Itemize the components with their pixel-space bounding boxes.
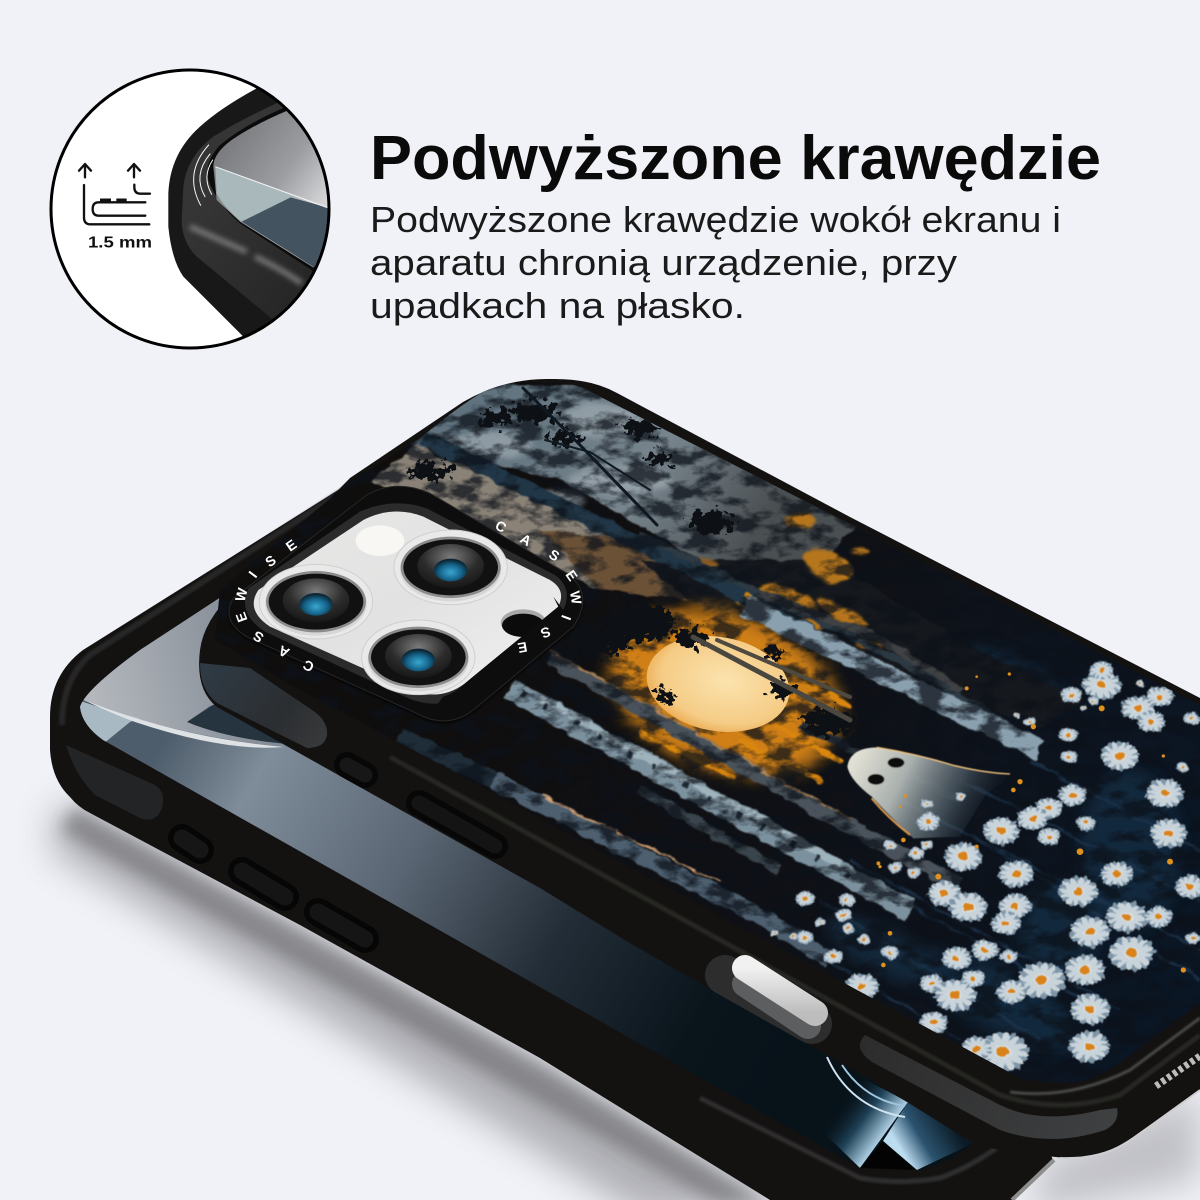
foliage silhouettes [408, 401, 854, 736]
brand lettering: C [300, 657, 317, 676]
corner gloss [1010, 1018, 1200, 1094]
drop shadow under phones [50, 800, 1200, 1200]
flash [356, 525, 404, 556]
orange specks [876, 666, 1186, 973]
brand lettering: S [250, 628, 266, 646]
ring band overlap [437, 597, 563, 705]
artwork base [200, 370, 1200, 1100]
trunk: second dark under moon [550, 657, 960, 885]
side band highlight [390, 757, 1200, 1105]
brand lettering: E [232, 610, 250, 624]
camera glass opening [254, 512, 561, 695]
beige band [370, 444, 608, 590]
arrow left [79, 164, 91, 177]
night streaks [820, 760, 1200, 1040]
white reflection line [215, 167, 328, 208]
black triangle [860, 1141, 916, 1170]
blue light beams [828, 1081, 908, 1168]
brand lettering: I [558, 613, 575, 622]
title: Podwyższone krawędzie [370, 124, 1101, 193]
brand lettering: S [546, 546, 563, 564]
trunk: dark blue top [418, 432, 824, 632]
translucent patch right [860, 1035, 1118, 1139]
translucent corner patch [66, 745, 163, 820]
bumper highlight [62, 480, 360, 725]
body text: upadkach na płasko. [370, 285, 745, 326]
dim trunk [800, 725, 960, 800]
raised lip [134, 185, 150, 194]
moon [646, 636, 790, 732]
trunk: gray upper [760, 593, 960, 690]
body text: aparatu chronią urządzenie, przy [370, 242, 957, 283]
icon: raised edge diagram [79, 164, 150, 224]
painted forest layer [370, 385, 1200, 1040]
dark wedge [187, 704, 282, 744]
body text: Podwyższone krawędzie wokół ekranu i [370, 199, 1061, 240]
port recess [745, 984, 808, 1026]
birch trunks [400, 438, 1040, 960]
lens: left [259, 564, 373, 639]
phone buttons [100, 195, 127, 206]
arrow right [128, 164, 140, 177]
brand lettering [232, 517, 585, 676]
trunk: thin dark upper [638, 532, 1010, 723]
screen dark lower [242, 197, 333, 267]
brand lettering: I [245, 568, 260, 581]
outer case [168, 88, 340, 337]
speaker holes [1156, 1056, 1200, 1086]
circle outline [51, 70, 329, 348]
inner bevel [245, 503, 567, 704]
screen of lower phone [80, 598, 973, 1170]
translucent patch left [200, 663, 327, 748]
silver right edge [1012, 1160, 1054, 1200]
moon glow [596, 596, 854, 788]
pressure arcs [194, 145, 213, 205]
orange patches upper right [682, 513, 884, 648]
raised edge detail circle [51, 70, 340, 348]
screen light wedge [215, 167, 327, 222]
small speaker pill [347, 765, 365, 775]
glow streaks [638, 684, 852, 786]
phone corner close-up [168, 88, 340, 337]
rim light [1060, 1090, 1200, 1158]
circle fill [51, 70, 329, 348]
branches and thin trunks over moon [523, 388, 850, 720]
case artwork: ghost in birch forest [200, 370, 1200, 1100]
brand lettering: W [567, 590, 585, 606]
measurement label: 1.5 mm [88, 235, 152, 252]
sky [410, 385, 860, 570]
lens: top right [394, 530, 507, 605]
camera bump outer ring [229, 486, 583, 721]
main white trunk [510, 688, 910, 910]
white curve lines [827, 1057, 905, 1117]
daisies [769, 659, 1200, 1075]
brand lettering: E [517, 639, 529, 656]
lower phone case [50, 460, 1060, 1200]
brand lettering: E [283, 536, 300, 554]
pale left wedge [80, 702, 140, 742]
body text [370, 199, 1061, 326]
port housing [725, 975, 812, 1024]
navy haze patches [817, 633, 1180, 1069]
case profile [84, 185, 149, 224]
button: volume up [242, 871, 285, 897]
brand lettering: S [539, 624, 553, 642]
black screen rim [207, 107, 340, 273]
case body [199, 379, 1200, 1158]
volume buttons on lower phone [182, 838, 365, 939]
birch bark marks [520, 692, 850, 877]
long side button [419, 803, 495, 846]
upper phone case [199, 379, 1200, 1158]
lower left trunk [396, 728, 498, 788]
bottom bezel highlight [700, 1098, 1000, 1182]
case body [50, 470, 1053, 1200]
brand lettering: E [563, 567, 581, 584]
glass reflection [84, 598, 270, 745]
button: action [182, 838, 200, 850]
dark upper band [640, 560, 1080, 730]
brand lettering: S [262, 552, 279, 570]
trunk: light right [745, 605, 1040, 750]
lidar sensor [501, 609, 546, 637]
port silver plate [745, 968, 815, 1013]
light clouds [448, 404, 670, 510]
orange edge T4 [743, 591, 758, 600]
white sliver [84, 700, 284, 748]
ghost [847, 747, 1013, 838]
brand lettering: W [232, 585, 251, 603]
foliage mottling [340, 375, 1200, 815]
brand lettering: C [492, 517, 509, 536]
ghost and daisies [769, 659, 1200, 1075]
trunk near bottom left [640, 790, 780, 870]
charging port [725, 968, 815, 1026]
frame inner lighter band [182, 102, 340, 320]
lens: bottom [362, 620, 475, 695]
screen [213, 110, 333, 267]
frame highlight stripe [190, 227, 302, 283]
camera ring with lenses [229, 486, 585, 721]
brand lettering: A [276, 642, 292, 661]
brand lettering: A [517, 530, 534, 549]
button: volume down [318, 912, 365, 939]
phone outline [93, 202, 145, 216]
